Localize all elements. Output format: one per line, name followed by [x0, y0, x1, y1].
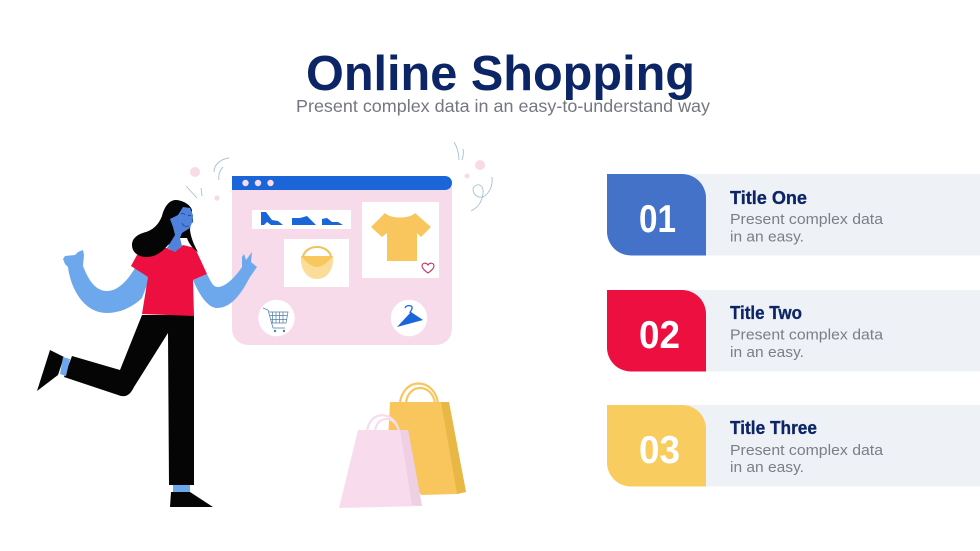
item text: in an easy. [730, 228, 804, 246]
item title: Title One [730, 187, 807, 208]
number: 01 [639, 198, 676, 241]
subtitle: Present complex data in an easy-to-understand way [296, 96, 710, 116]
item title: Title Two [730, 302, 802, 323]
front shoe [170, 492, 213, 507]
title: Online Shopping [306, 47, 695, 101]
item title: Title Three [730, 417, 817, 438]
shirt [131, 245, 207, 316]
back sock [60, 357, 70, 376]
item text [730, 326, 884, 361]
product card: t-shirt [362, 202, 439, 278]
window dots [242, 180, 274, 186]
number: 02 [639, 314, 680, 357]
product card: shoes [252, 210, 351, 229]
card background [680, 405, 980, 486]
face details [181, 213, 193, 226]
item text: Present complex data [730, 326, 884, 344]
window title bar [232, 176, 452, 190]
illustration: browser window [232, 176, 452, 345]
illustration: woman [37, 200, 257, 507]
right arm [193, 252, 257, 308]
item text: in an easy. [730, 459, 804, 476]
item text [730, 442, 884, 476]
decorative accents near window [186, 142, 492, 211]
item text [730, 211, 884, 246]
yellow bag [388, 384, 466, 495]
item text: Present complex data [730, 442, 884, 459]
card background [680, 174, 980, 256]
number block [607, 174, 706, 256]
pants [64, 315, 194, 485]
number block [607, 405, 706, 486]
product card: basket bag [284, 239, 349, 287]
face and neck [167, 207, 193, 252]
panel: item 02 [607, 290, 980, 372]
icon: hanger [391, 300, 427, 336]
hair [132, 200, 198, 257]
panel: item 03 [607, 405, 980, 486]
item text: Present complex data [730, 211, 884, 228]
front sock [173, 485, 190, 492]
icon: heart [422, 263, 434, 273]
pink bag [339, 415, 422, 508]
left arm [63, 250, 150, 313]
number: 03 [639, 429, 680, 472]
card background [680, 290, 980, 372]
illustration: shopping bags [339, 384, 466, 508]
back shoe [37, 350, 64, 391]
item text: in an easy. [730, 344, 804, 361]
panel: item 01 [607, 174, 980, 256]
icon: shopping cart [258, 300, 295, 336]
window body [232, 186, 452, 345]
number block [607, 290, 706, 372]
